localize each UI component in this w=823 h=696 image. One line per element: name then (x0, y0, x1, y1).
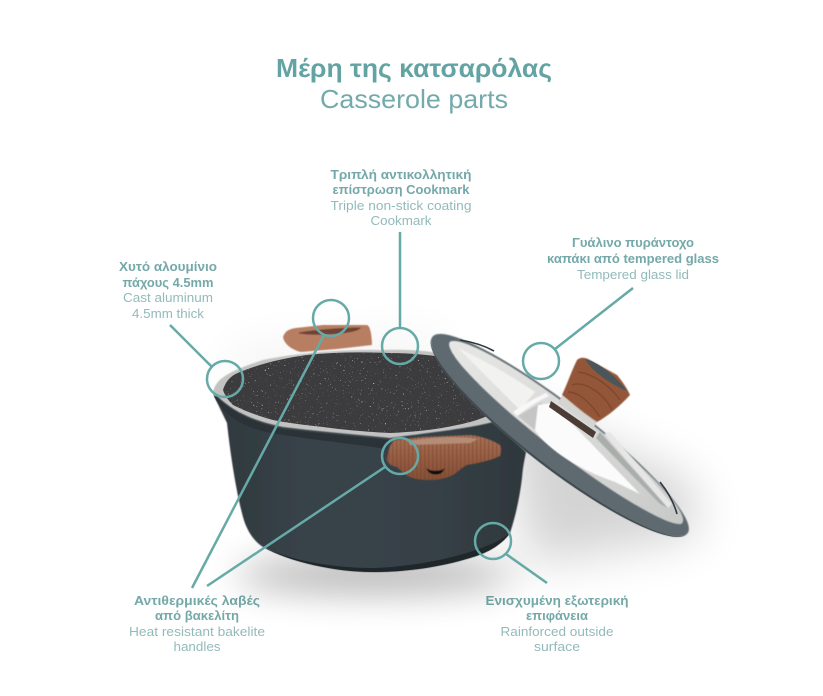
callout: outside surface (475, 523, 547, 583)
label: reinforced surface: Ενισχυμένη εξωτερική (486, 594, 628, 608)
title: Casserole parts (320, 84, 508, 114)
label: bakelite handles: Αντιθερμικές λαβές (134, 594, 260, 608)
label: reinforced surface: surface (534, 640, 580, 654)
knob base (558, 396, 597, 428)
back handle (283, 325, 372, 352)
title: Μέρη της κατσαρόλας (276, 53, 552, 83)
front handle (387, 435, 501, 480)
label: bakelite handles: από βακελίτη (155, 609, 239, 623)
lid lower edge (412, 337, 688, 560)
glass highlights (458, 348, 672, 508)
label: reinforced surface: επιφάνεια (526, 609, 588, 623)
label: cast aluminum: 4.5mm thick (132, 307, 205, 321)
label: bakelite handles (129, 594, 265, 654)
casserole pot (213, 325, 526, 572)
knob (562, 358, 630, 422)
callout: non-stick coating (382, 232, 418, 364)
callout: lid (523, 288, 633, 379)
label: non-stick coating: Cookmark (370, 214, 432, 228)
lid band (549, 401, 596, 438)
drop shadow (230, 335, 700, 593)
label: reinforced surface: Rainforced outside (500, 625, 614, 639)
label: non-stick coating (330, 168, 472, 228)
label: tempered glass lid: Tempered glass lid (577, 268, 689, 282)
callout: back handle (192, 300, 349, 588)
label: reinforced surface (486, 594, 628, 654)
speckled non-stick interior (223, 352, 486, 433)
label: non-stick coating: επίστρωση Cookmark (332, 183, 470, 197)
label: tempered glass lid: Γυάλινο πυράντοχο (572, 236, 694, 250)
label: bakelite handles: Heat resistant bakelite (129, 625, 265, 639)
white rim (213, 350, 510, 438)
bottom base shading (263, 533, 510, 572)
label: cast aluminum: Cast aluminum (123, 291, 213, 305)
label: non-stick coating: Triple non-stick coating (330, 199, 472, 213)
glass dome (437, 325, 697, 538)
label: cast aluminum: Χυτό αλουμίνιο (119, 260, 217, 274)
rim lower shadow edge (213, 394, 390, 449)
label: tempered glass lid (547, 236, 719, 282)
pot body (214, 390, 526, 572)
lid rim (412, 313, 706, 560)
label: non-stick coating: Τριπλή αντικολλητική (330, 168, 472, 182)
label: cast aluminum: πάχους 4.5mm (122, 276, 214, 290)
callout: front handle (207, 438, 418, 586)
title (276, 53, 552, 114)
label: bakelite handles: handles (174, 640, 220, 654)
knob top cap (585, 359, 627, 391)
infographic: casserole parts (119, 58, 718, 651)
label: cast aluminum (119, 260, 217, 321)
knob wood grain (568, 372, 620, 417)
label: tempered glass lid: καπάκι από tempered glass (547, 252, 719, 266)
callout: cast aluminum (170, 325, 243, 397)
glass lid (412, 313, 706, 560)
lid top dark arcs (460, 340, 677, 514)
